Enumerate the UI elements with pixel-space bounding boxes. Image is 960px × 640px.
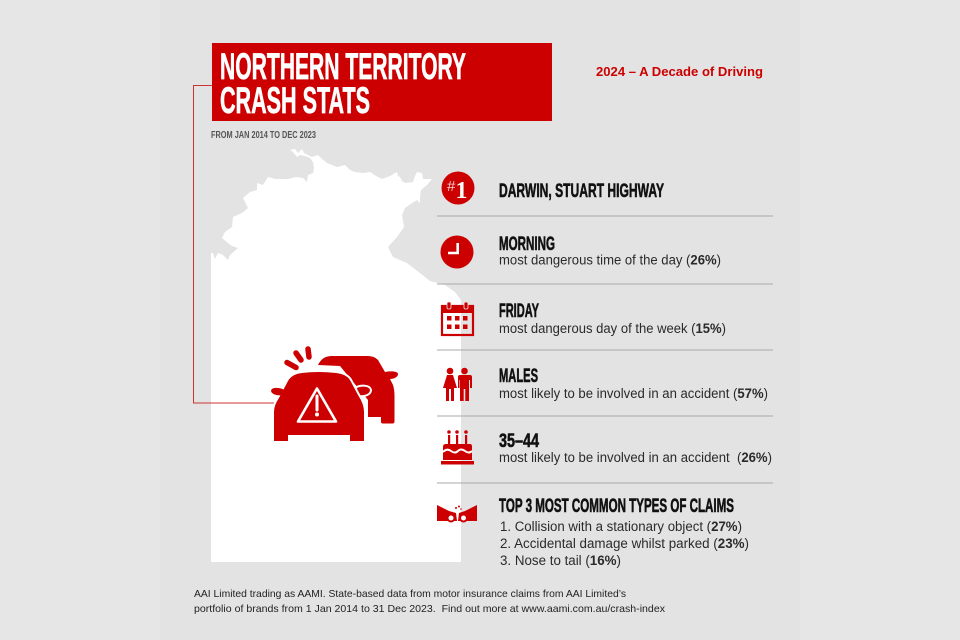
row: top claims: 1. Collision with a stationary object (27%)	[500, 519, 742, 534]
icon: woman and man	[443, 368, 472, 401]
title banner	[212, 43, 552, 121]
icon: head-on collision	[437, 505, 477, 522]
row: top claims: 2. Accidental damage whilst parked (23%)	[500, 536, 749, 551]
row: males: most likely to be involved in an accident (57%)	[499, 386, 768, 401]
connector line from title to cars	[194, 86, 276, 403]
icon: birthday cake	[441, 430, 474, 464]
icon: crashed cars with warning	[271, 349, 398, 441]
row: age group: most likely to be involved in an accident (26%)	[499, 450, 772, 465]
footnote: AAI Limited trading as AAMI. State-based data from motor insurance claims from AAI Limited’s	[194, 588, 626, 600]
row: age group: 35–44	[499, 431, 539, 452]
header tagline: 2024 – A Decade of Driving	[596, 64, 763, 79]
row: age group	[441, 430, 772, 465]
row: morning: MORNING	[499, 234, 555, 255]
row: top claims: TOP 3 MOST COMMON TYPES OF CLAIMS	[499, 496, 734, 517]
icon: warning triangle	[298, 388, 336, 422]
row: friday	[442, 301, 726, 336]
icon: calendar	[442, 302, 473, 335]
row: top location: DARWIN, STUART HIGHWAY	[499, 181, 664, 202]
map: Northern Territory	[211, 149, 461, 562]
icon: number one badge: 1	[456, 178, 468, 204]
title banner: NORTHERN TERRITORY	[220, 46, 466, 87]
row: males: MALES	[499, 366, 538, 387]
icon: impact marks	[287, 349, 309, 368]
footnote: portfolio of brands from 1 Jan 2014 to 31 Dec 2023. Find out more at www.aami.com.au/crash-index	[194, 603, 666, 615]
icon: number one badge	[442, 172, 474, 204]
row: morning	[440, 234, 721, 268]
icon: clock	[440, 236, 474, 268]
row: top claims	[437, 496, 749, 568]
row: top claims: 3. Nose to tail (16%)	[500, 553, 621, 568]
row: friday: FRIDAY	[499, 301, 539, 322]
subtitle: date range: FROM JAN 2014 TO DEC 2023	[211, 130, 316, 141]
icon: number one badge: #	[447, 178, 456, 195]
row: top location	[442, 172, 664, 204]
row: males	[443, 366, 768, 401]
title banner: CRASH STATS	[220, 80, 370, 121]
row: friday: most dangerous day of the week (15%)	[499, 321, 726, 336]
row: morning: most dangerous time of the day (26%)	[499, 252, 721, 268]
footnote	[194, 588, 666, 615]
